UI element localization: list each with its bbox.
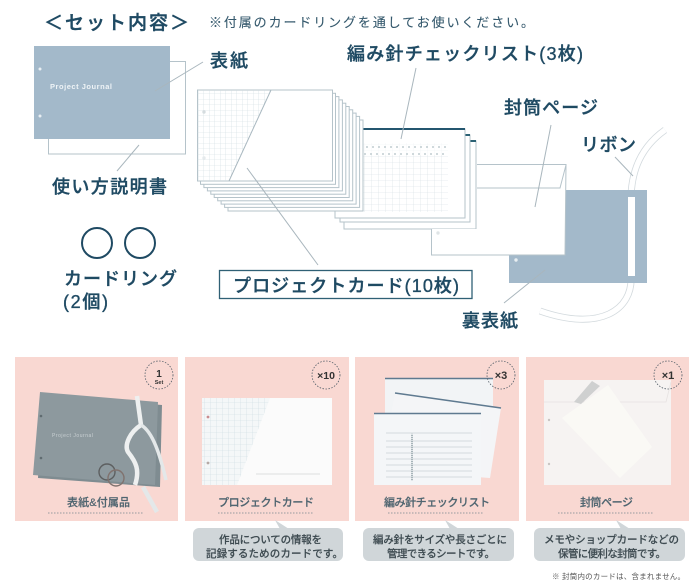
- photo: card: [202, 398, 332, 485]
- callout: checklist: 編み針をサイズや長さごとに: [373, 533, 507, 546]
- front cover: [34, 46, 170, 139]
- callout: project card: 記録するためのカードです。: [206, 547, 343, 560]
- label box: project cards: [220, 270, 472, 298]
- footnote: ※ 封筒内のカードは、含まれません。: [552, 571, 685, 581]
- callout: envelope: メモやショップカードなどの: [544, 534, 679, 546]
- usage guide sheet: [48, 62, 186, 154]
- leader: back cover: [504, 270, 545, 303]
- label: card rings: カードリング: [64, 269, 177, 289]
- envelope page: [432, 164, 566, 255]
- ribbon inner: [540, 130, 665, 319]
- label: back cover: 裏表紙: [462, 311, 518, 331]
- badge: x10: ×10: [317, 370, 335, 382]
- callout: project card: 作品についての情報を: [219, 533, 322, 546]
- caption: 編み針チェックリスト: [384, 495, 490, 509]
- ribbon: [540, 130, 665, 319]
- photo: envelope: [544, 380, 671, 485]
- note: ring usage: ※付属のカードリングを通してお使いください。: [209, 15, 534, 30]
- front cover: Project Journal: [50, 82, 112, 91]
- badge: x3: [487, 361, 515, 389]
- leader: project cards: [247, 168, 318, 265]
- callout: envelope: [534, 520, 685, 561]
- label: front cover: 表紙: [210, 51, 248, 71]
- label: ribbon: リボン: [581, 135, 636, 155]
- badge: x10: [312, 361, 340, 389]
- leader: front cover: [155, 62, 203, 91]
- callout: envelope: 保管に便利な封筒です。: [558, 547, 666, 560]
- caption: プロジェクトカード: [218, 496, 314, 509]
- caption: 表紙&付属品: [67, 495, 130, 509]
- panel: project card: [185, 357, 349, 521]
- leader: usage guide: [117, 145, 139, 171]
- panel: needle checklist: [355, 357, 519, 521]
- caption: 封筒ページ: [580, 495, 633, 509]
- panel: envelope page: [526, 357, 689, 521]
- photo: checklist sheets: [374, 378, 501, 485]
- leader: ribbon: [615, 157, 633, 176]
- leader: envelope page: [535, 125, 551, 207]
- leader: checklist: [401, 68, 416, 139]
- badge: x1: [654, 361, 682, 389]
- callout: project card: [193, 520, 343, 561]
- heading: set contents: ＜セット内容＞: [44, 12, 189, 34]
- label: ring count: (2個): [63, 292, 108, 312]
- photo: cover set: [33, 392, 166, 512]
- knitting needle checklist sheets: [335, 129, 476, 229]
- callout: checklist: 管理できるシートです。: [387, 547, 495, 560]
- label: envelope page: 封筒ページ: [504, 98, 598, 118]
- project cards stack: [198, 90, 363, 211]
- icon: card rings: [82, 228, 155, 258]
- back cover: [509, 190, 647, 283]
- photo: cover set: Project Journal: [52, 433, 93, 439]
- badge: 1 set: 1: [156, 369, 162, 380]
- badge: 1 set: [145, 361, 173, 389]
- panel: cover and accessories: [15, 357, 178, 521]
- callout: checklist: [363, 520, 514, 561]
- label box: project cards: プロジェクトカード(10枚): [233, 276, 459, 296]
- badge: x1: ×1: [662, 370, 674, 382]
- badge: x3: ×3: [495, 370, 507, 382]
- label: checklist: 編み針チェックリスト(3枚): [347, 44, 583, 64]
- badge: 1 set: Set: [155, 380, 163, 386]
- label: usage guide: 使い方説明書: [52, 177, 167, 197]
